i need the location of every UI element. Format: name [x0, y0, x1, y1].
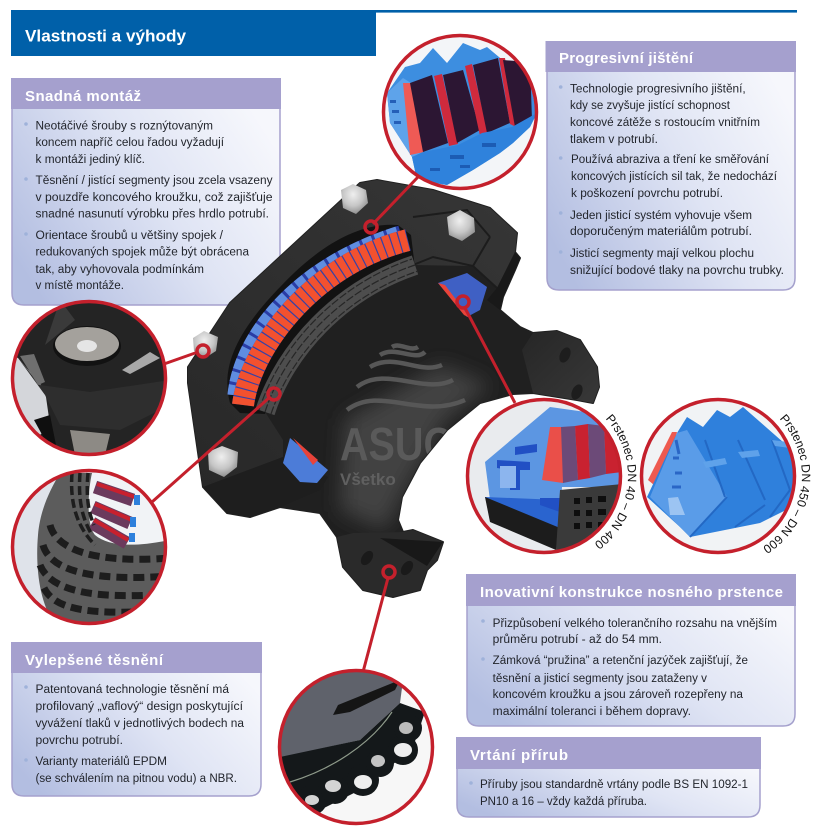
text block: Snadná montáž: v místě montáže.	[36, 280, 124, 292]
text block: Progresivní jištění: kdy se zvyšuje jistící schopnost	[570, 100, 731, 112]
ring opening	[227, 225, 415, 414]
text block: Vrtání přírub	[469, 779, 748, 808]
text block: Progresivní jištění: k poškození povrchu potrubí.	[571, 188, 723, 200]
text block: Snadná montáž: redukovaných spojek může být obrácena	[36, 247, 250, 259]
top rule	[11, 10, 797, 13]
text block: Progresivní jištění: tlakem v potrubí.	[570, 134, 658, 146]
text block: Vylepšené těsnění: profilovaný „vaflový“ design poskytující	[36, 701, 244, 713]
segment insert: lower	[283, 438, 328, 483]
lower pipe flange	[337, 530, 443, 597]
watermark: Všetko	[340, 470, 396, 489]
text block: Vylepšené těsnění: Varianty materiálů EPDM	[36, 756, 167, 768]
panel: Vylepšené těsnění	[11, 642, 262, 796]
text block: Inovativní konstrukce: průměru potrubí - až do 54 mm.	[493, 634, 662, 646]
text block: Inovativní konstrukce: koncovém kroužku a jsou zároveň rozepřeny na	[493, 689, 744, 701]
text block: Progresivní jištění	[559, 84, 784, 277]
text block: Progresivní jištění: snižující bodové tlaky na povrchu trubky.	[570, 265, 784, 277]
panel: Snadná montáž	[11, 78, 281, 305]
text block: Vylepšené těsnění: povrchu potrubí.	[36, 735, 123, 747]
text block: Snadná montáž	[24, 120, 273, 292]
callout circle: bolt detail	[10, 300, 170, 460]
text block: Vylepšené těsnění: (se schválením na pitnou vodu) a NBR.	[36, 773, 237, 785]
title banner	[11, 12, 376, 56]
heading: Inovativní konstrukce: Inovativní konstrukce nosného prstence	[480, 584, 783, 601]
callout circle: flange drilling detail	[275, 665, 440, 830]
text block: Snadná montáž: Neotáčivé šrouby s roznýtovaným	[36, 120, 213, 132]
heading: Progresivní jištění: Progresivní jištění	[559, 50, 694, 67]
red gripper band	[243, 240, 408, 405]
connector lines	[152, 177, 515, 672]
panel: Vrtání přírub	[456, 737, 761, 817]
text block: Progresivní jištění: Technologie progresivního jištění,	[570, 84, 746, 96]
label: Prstenec DN 450 – DN 600: Prstenec DN 450 – DN 600	[764, 414, 810, 553]
text block: Inovativní konstrukce	[481, 618, 777, 718]
text block: Vylepšené těsnění: vyvážení tlaků v jednotlivých bodech na	[36, 718, 245, 730]
panel: Progresivní jištění	[546, 41, 796, 290]
flange facet lines	[413, 210, 497, 288]
callout circle: gasket detail	[10, 470, 170, 630]
near flange side	[203, 457, 328, 517]
gasket band	[259, 259, 418, 414]
callout circle: ring DN 450 – DN 600	[640, 398, 800, 558]
text block: Progresivní jištění: Používá abraziva a tření ke směřování	[571, 154, 770, 166]
text block: Snadná montáž: v pouzdře koncového kroužku, což zajišťuje	[36, 192, 272, 204]
watermark: ASUC	[340, 418, 452, 470]
heading: Vrtání přírub: Vrtání přírub	[470, 747, 568, 764]
segment insert: right	[438, 273, 487, 318]
text block: Vylepšené těsnění: Patentovaná technologie těsnění má	[36, 684, 230, 696]
text block: Snadná montáž: Těsnění / jistící segmenty jsou zcela vsazeny	[36, 175, 273, 187]
title: Vlastnosti a výhody	[25, 26, 187, 46]
text block: Progresivní jištění: koncových jistících sil tak, že nedochází	[571, 171, 778, 183]
near flange face	[188, 180, 517, 487]
text block: Snadná montáž: tak, aby vyhovovala podmínkám	[36, 264, 204, 276]
text block: Progresivní jištění: Jeden jisticí systém vyhovuje všem	[570, 210, 752, 222]
right pipe flange	[522, 331, 599, 403]
text block: Vrtání přírub: Příruby jsou standardně vrtány podle BS EN 1092-1	[480, 779, 748, 791]
product: coupling body	[188, 180, 599, 597]
silhouette	[188, 180, 599, 597]
watermark	[340, 346, 465, 489]
text block: Vrtání přírub: PN10 a 16 – vždy každá příruba.	[480, 796, 647, 808]
blue gripper band	[233, 231, 400, 395]
text block: Inovativní konstrukce: těsnění a jisticí segmenty jsou zataženy v	[493, 673, 707, 685]
heading: Snadná montáž: Snadná montáž	[25, 88, 141, 105]
text block: Inovativní konstrukce: maximální toleranci i během dopravy.	[493, 706, 691, 718]
text block: Vylepšené těsnění	[24, 684, 245, 785]
bolts	[193, 184, 475, 477]
text block: Snadná montáž: k montáži jediný klíč.	[36, 154, 145, 166]
text block: Inovativní konstrukce: Přizpůsobení velkého tolerančního rozsahu na vnějším	[493, 618, 777, 630]
callout circle: ring DN 40 – DN 400	[465, 398, 625, 558]
label: Prstenec DN 40 – DN 400: Prstenec DN 40 – DN 400	[596, 414, 636, 548]
heading: Vylepšené těsnění: Vylepšené těsnění	[25, 652, 164, 669]
pipe highlight	[340, 365, 490, 530]
callout circle: progressive grip detail	[380, 30, 540, 195]
text block: Snadná montáž: Orientace šroubů u většiny spojek /	[36, 230, 224, 242]
text block: Progresivní jištění: doporučeným materiálům potrubí.	[570, 226, 752, 238]
text block: Snadná montáž: snadné nasunutí výrobku přes hrdlo potrubí.	[36, 208, 269, 220]
text block: Snadná montáž: koncem napříč celou řadou vyžadují	[36, 137, 225, 149]
text block: Progresivní jištění: Jisticí segmenty mají velkou plochu	[570, 248, 754, 260]
text block: Inovativní konstrukce: Zámková “pružina” a retenční jazýček zajišťují, že	[493, 655, 748, 667]
panel: Inovativní konstrukce nosného prstence	[466, 574, 796, 726]
text block: Progresivní jištění: koncové zátěže s rostoucím vnitřním	[570, 117, 760, 129]
